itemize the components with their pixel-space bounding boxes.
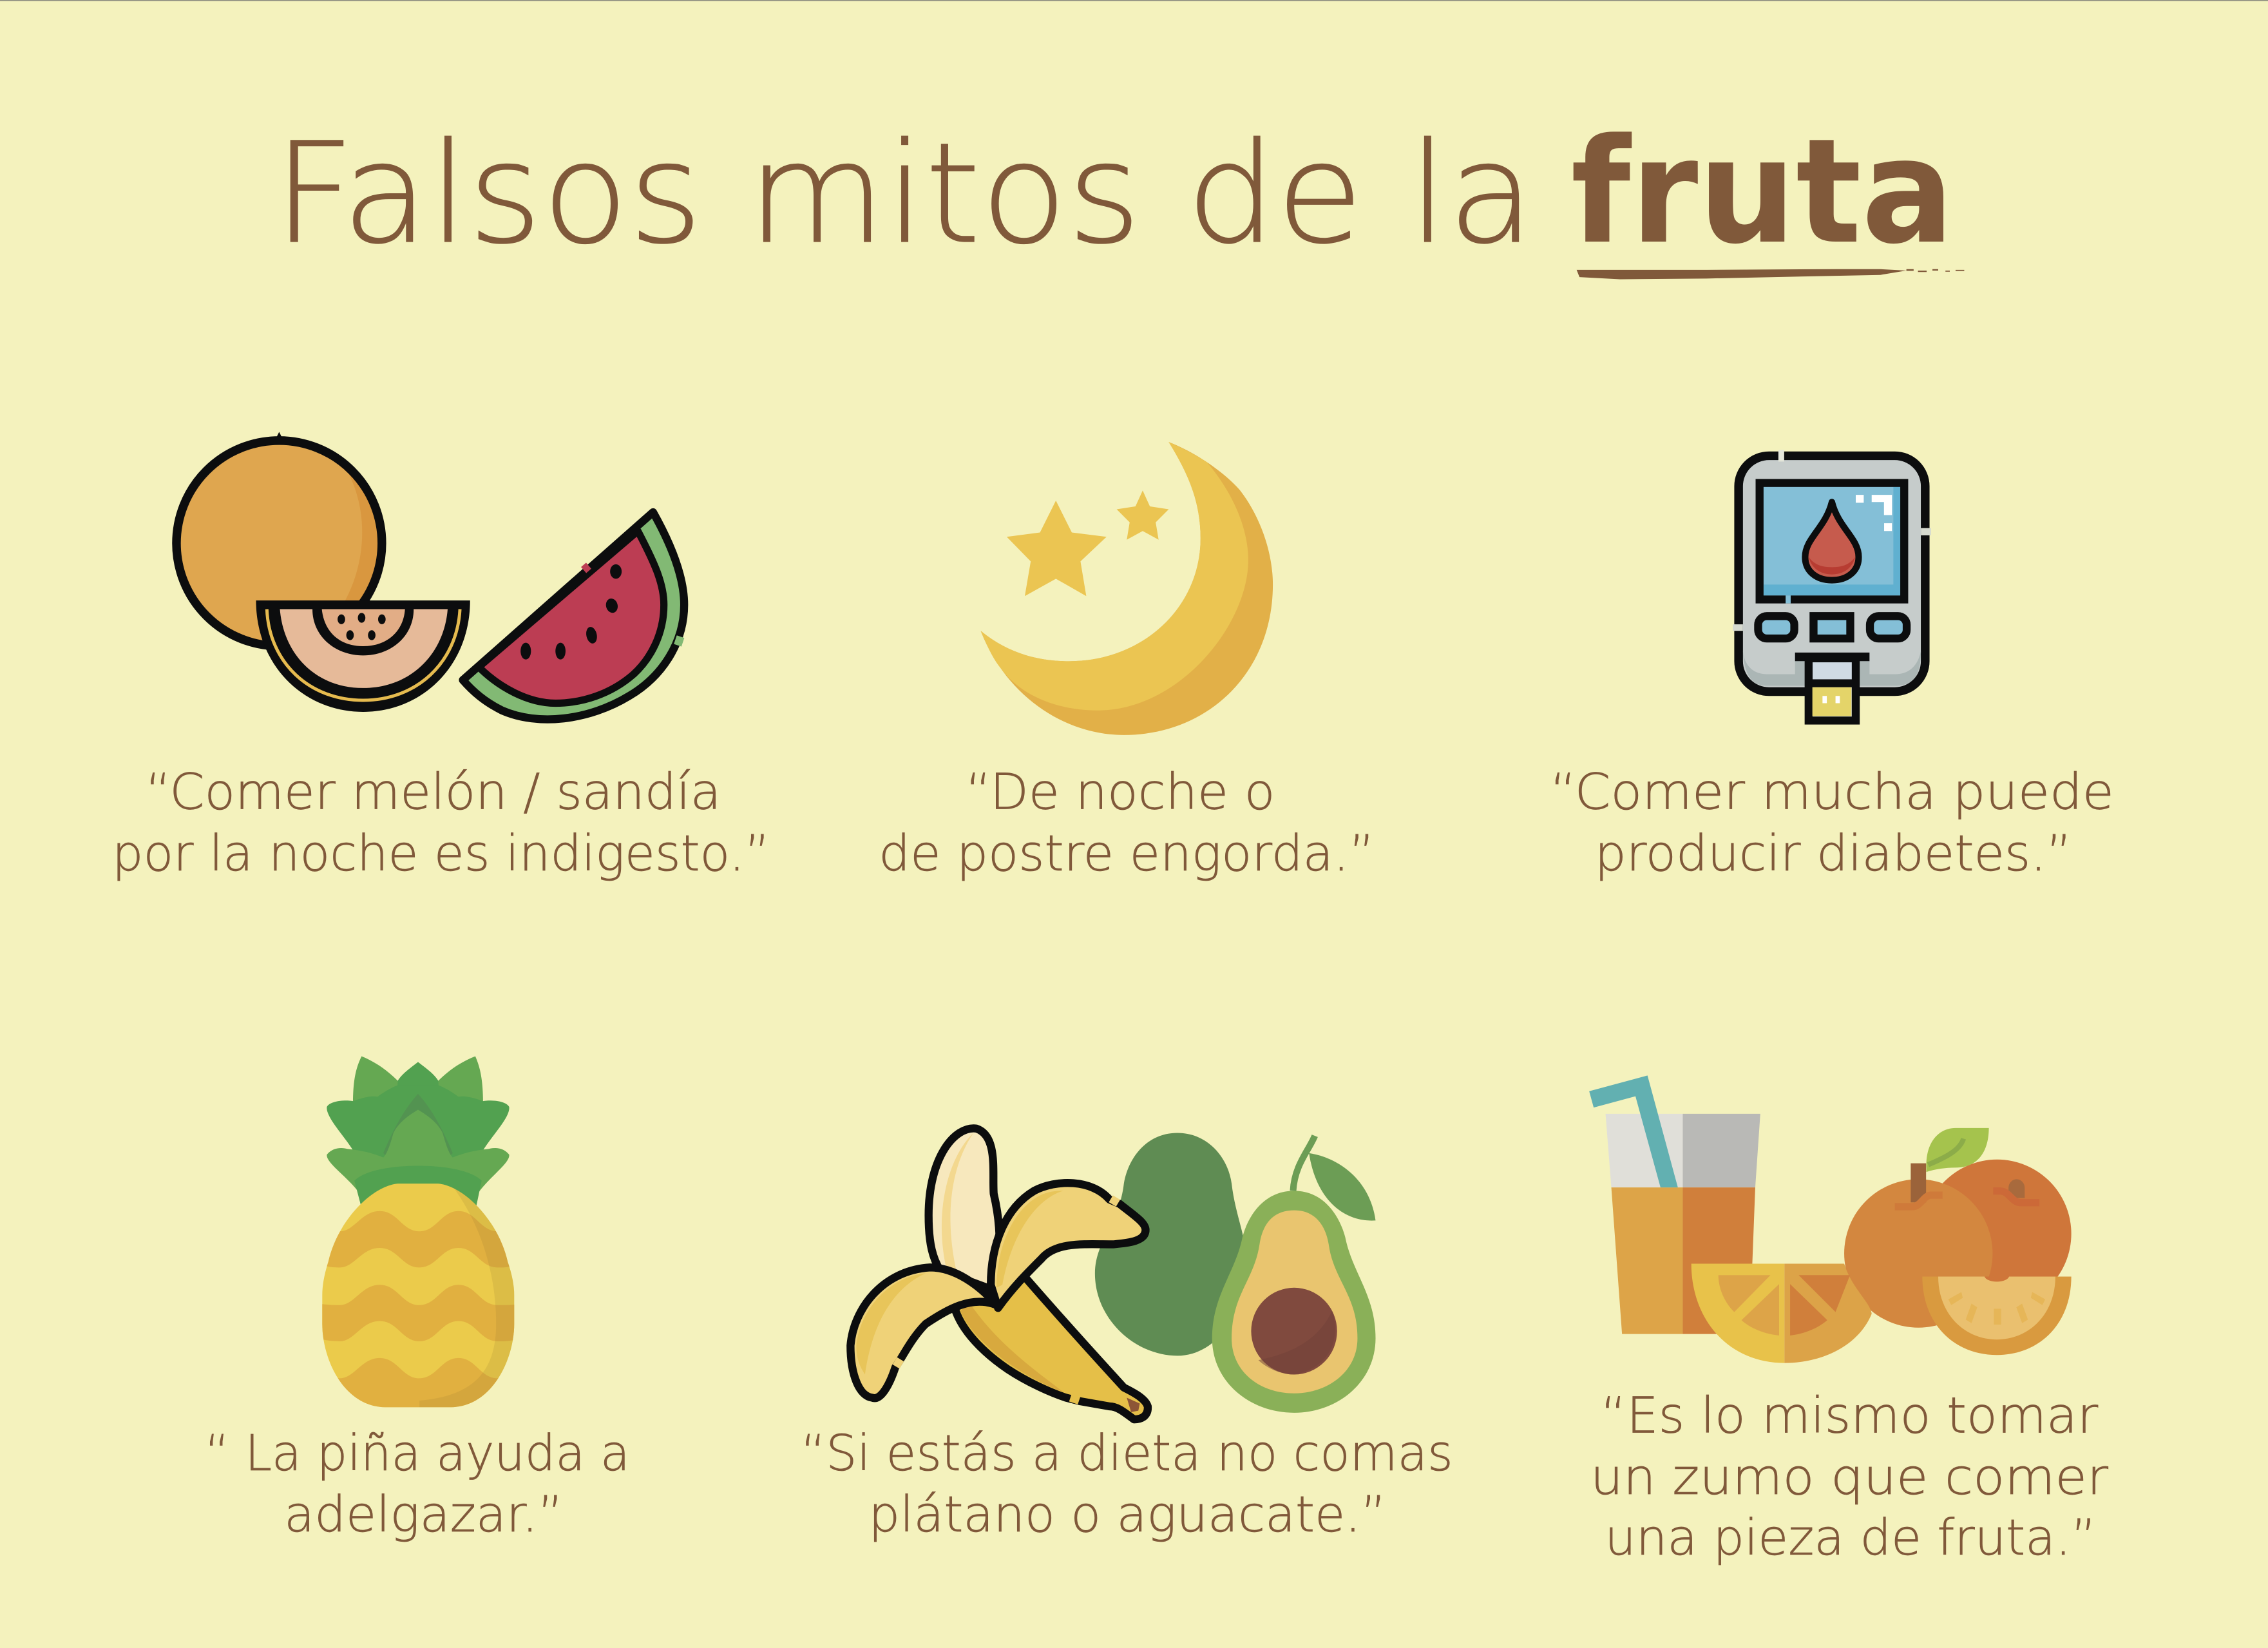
- caption: moon: de postre engorda.”: [879, 825, 1375, 883]
- straw: [1589, 1075, 1678, 1187]
- orange half wedge: [1691, 1264, 1872, 1363]
- front avocado halves: [1212, 1191, 1376, 1413]
- icon: melon and watermelon: [176, 432, 684, 720]
- watermelon slice: [463, 512, 684, 720]
- meter body: [1739, 455, 1925, 692]
- caption: juice: [1590, 1387, 2109, 1567]
- back orange: [1923, 1160, 2072, 1308]
- avocado pit: [1251, 1288, 1337, 1375]
- pineapple body: [318, 1179, 520, 1411]
- caption: melon: “Comer melón / sandía: [146, 763, 721, 821]
- icon: moon and stars: [980, 442, 1273, 735]
- screen: [1760, 483, 1904, 599]
- glass: [1606, 1114, 1760, 1334]
- test strip: [1795, 653, 1869, 661]
- buttons: [1758, 616, 1795, 638]
- icon: pineapple: [318, 1056, 520, 1411]
- caption: pineapple: “ La piña ayuda a: [205, 1425, 630, 1482]
- title: fruta: [1571, 108, 1954, 276]
- caption: juice: una pieza de fruta.”: [1605, 1509, 2097, 1567]
- icon: avocado: [1095, 1133, 1376, 1413]
- banana peel body: [955, 1272, 1148, 1419]
- melon whole: [176, 432, 383, 646]
- caption: pineapple: [205, 1425, 630, 1544]
- leaf: [1926, 1128, 1989, 1172]
- icon: glucose meter: [1733, 450, 1931, 720]
- small star: [1117, 490, 1168, 540]
- icon: juice and oranges: [1589, 1075, 2072, 1363]
- caption: glucose meter: producir diabetes.”: [1595, 825, 2072, 883]
- caption: pineapple: adelgazar.”: [284, 1486, 564, 1544]
- caption: moon: “De noche o: [966, 763, 1275, 821]
- banana left peel: [850, 1267, 996, 1398]
- caption: juice: “Es lo mismo tomar: [1601, 1387, 2099, 1444]
- pineapple crown: [327, 1056, 510, 1208]
- caption: banana and avocado: plátano o aguacate.”: [868, 1486, 1386, 1544]
- title underline brush stroke: [1577, 269, 1964, 279]
- banana right peel: [991, 1183, 1145, 1308]
- melon slice: [256, 600, 470, 712]
- title: Falsos mitos de la: [273, 113, 1535, 274]
- front orange: [1844, 1179, 1992, 1328]
- avocado stem and leaf: [1293, 1136, 1315, 1191]
- caption: juice: un zumo que comer: [1590, 1449, 2109, 1506]
- caption: melon: por la noche es indigesto.”: [112, 825, 770, 883]
- caption: banana and avocado: “Si estás a dieta no comas: [801, 1425, 1453, 1482]
- moon: [980, 442, 1273, 735]
- big star: [1007, 501, 1107, 596]
- caption: moon: [879, 763, 1375, 883]
- caption: banana and avocado: [801, 1425, 1453, 1544]
- icon: banana: [850, 1128, 1148, 1419]
- caption: glucose meter: “Comer mucha puede: [1550, 763, 2114, 821]
- banana inner fruit: [929, 1128, 1000, 1290]
- back avocado: [1095, 1133, 1247, 1356]
- blood drop: [1805, 502, 1859, 580]
- caption: glucose meter: [1550, 763, 2114, 883]
- orange bottom wedge: [1922, 1276, 2072, 1355]
- caption: melon: [112, 763, 770, 883]
